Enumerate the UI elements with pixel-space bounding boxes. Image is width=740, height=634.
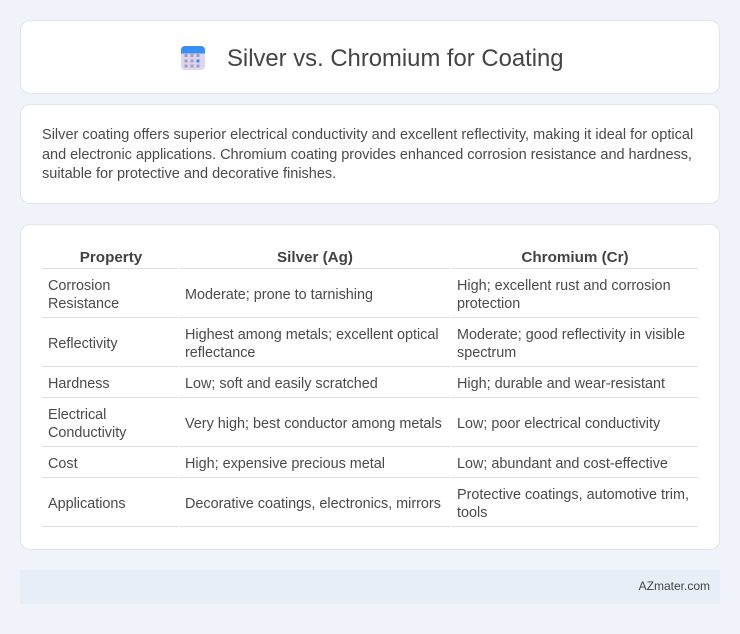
column headers bbox=[42, 248, 698, 268]
comparison table: Low; poor electrical conductivity bbox=[457, 416, 660, 432]
comparison table: Protective coatings, automotive trim, bbox=[457, 487, 689, 503]
title: Silver vs. Chromium for Coating bbox=[227, 45, 564, 72]
row: corrosion resistance: Resistance bbox=[48, 296, 119, 312]
summary text: Silver coating offers superior electrical conductivity and excellent reflectivity, making it ideal for optical bbox=[42, 127, 693, 143]
summary panel bbox=[20, 104, 720, 204]
row: electrical conductivity: Conductivity bbox=[48, 425, 126, 441]
row: electrical conductivity: Electrical bbox=[48, 407, 106, 423]
comparison table: Highest among metals; excellent optical bbox=[185, 327, 439, 343]
comparison table: Very high; best conductor among metals bbox=[185, 416, 442, 432]
row: corrosion resistance bbox=[48, 278, 119, 312]
footer bar bbox=[20, 570, 720, 604]
comparison table: Decorative coatings, electronics, mirrors bbox=[185, 496, 441, 512]
comparison table: Silver (Ag) bbox=[277, 249, 353, 266]
summary text bbox=[42, 127, 693, 182]
comparison table: High; expensive precious metal bbox=[185, 456, 385, 472]
comparison table: reflectance bbox=[185, 345, 255, 361]
icon: calendar bbox=[181, 46, 205, 70]
row: corrosion resistance: Corrosion bbox=[48, 278, 110, 294]
row: applications: Applications bbox=[48, 496, 126, 512]
header panel bbox=[20, 20, 720, 94]
comparison table: Low; abundant and cost-effective bbox=[457, 456, 668, 472]
comparison table: Moderate; good reflectivity in visible bbox=[457, 327, 685, 343]
comparison table: protection bbox=[457, 296, 520, 312]
comparison table: High; excellent rust and corrosion bbox=[457, 278, 671, 294]
summary text: suitable for protective and decorative finishes. bbox=[42, 166, 336, 182]
comparison table: Chromium (Cr) bbox=[521, 249, 629, 266]
table panel bbox=[20, 224, 720, 550]
footer credit: AZmater.com bbox=[639, 579, 710, 593]
comparison table: Property bbox=[80, 249, 142, 266]
row: electrical conductivity bbox=[48, 407, 126, 441]
row: reflectivity: Reflectivity bbox=[48, 336, 118, 352]
summary text: and electronic applications. Chromium coating provides enhanced corrosion resistance and hardness, bbox=[42, 146, 692, 162]
row: cost: Cost bbox=[48, 456, 78, 472]
comparison table: High; durable and wear-resistant bbox=[457, 376, 665, 392]
comparison table: Low; soft and easily scratched bbox=[185, 376, 378, 392]
comparison table: spectrum bbox=[457, 345, 516, 361]
comparison table: Moderate; prone to tarnishing bbox=[185, 287, 373, 303]
row: hardness: Hardness bbox=[48, 376, 110, 392]
comparison table: tools bbox=[457, 505, 487, 521]
